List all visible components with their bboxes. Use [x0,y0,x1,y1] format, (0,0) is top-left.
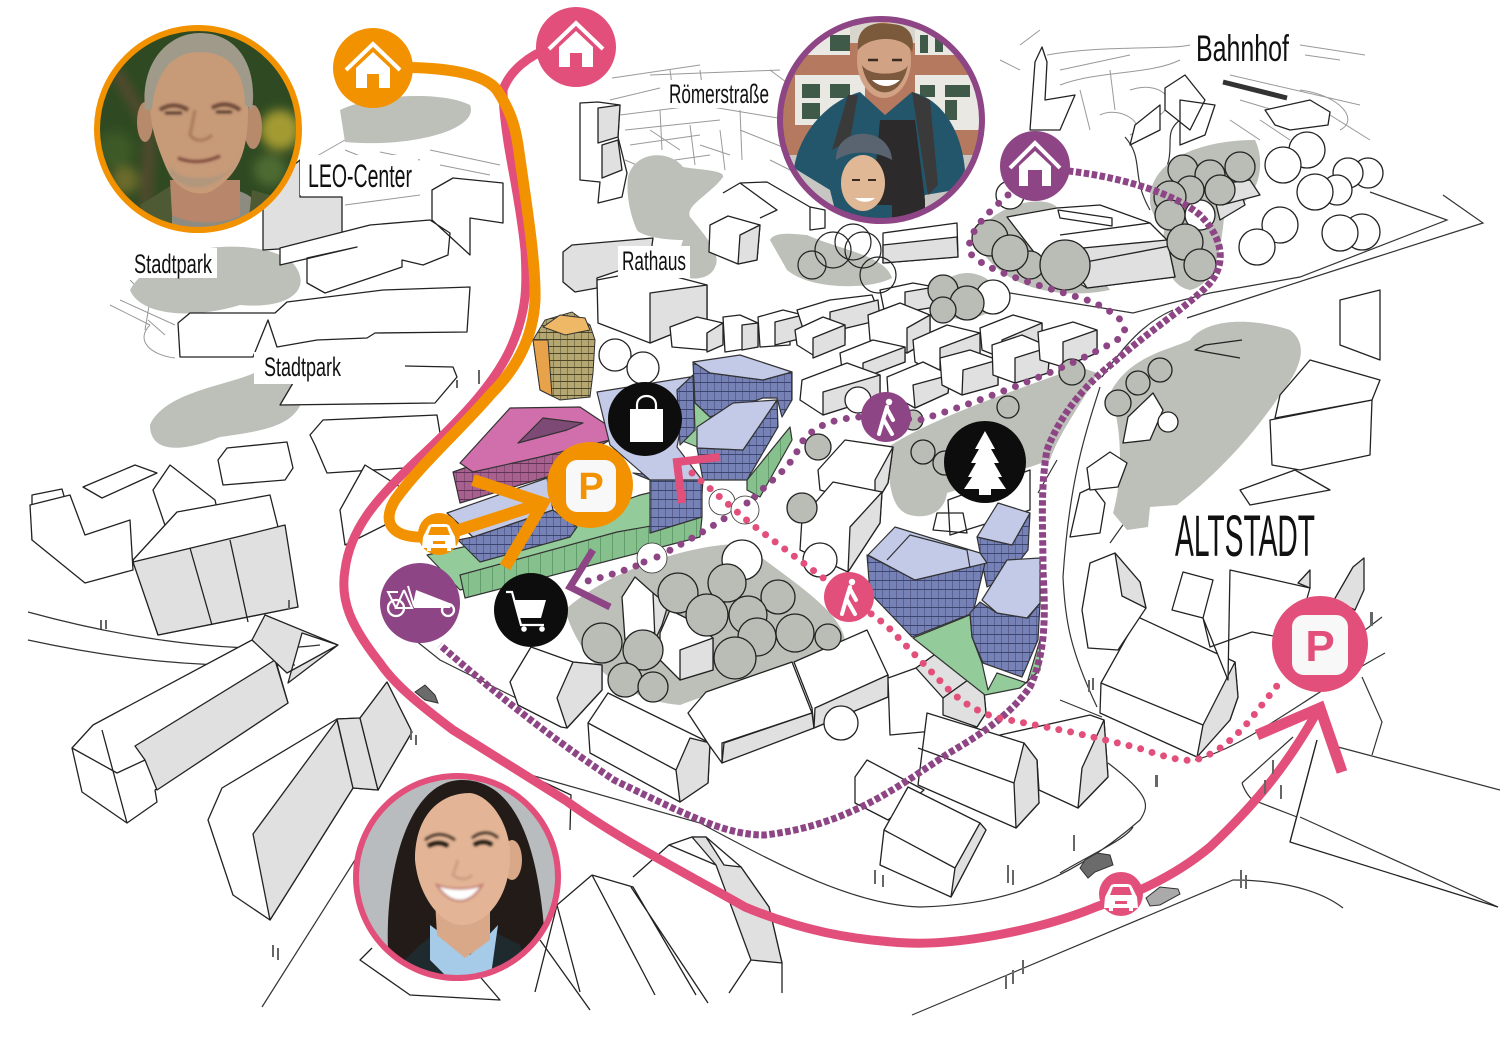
lower block roof [447,478,553,537]
label: LEO-Center: LEO-Center [308,158,412,194]
tower side [677,375,695,445]
left block roof [868,527,987,580]
green spaces [130,96,1301,705]
building: south of Stadtpark [310,415,440,473]
buildings: south corner [518,770,782,1003]
label: ALTSTADT: ALTSTADT [1175,504,1315,569]
label: Stadtpark upper: Stadtpark [134,249,212,279]
back tower facade [977,513,1030,587]
pink route: car route to Altstadt parking [344,48,1317,943]
green space: residential grove [935,273,1005,319]
small figures [100,370,1373,989]
buildings: Bahnhof cluster [1030,47,1075,130]
buildings: Altstadt [1100,617,1238,757]
building: Bahnhof terrace [1007,205,1175,288]
buildings: tower block north [580,102,627,203]
building: annex [252,615,338,683]
portrait: father and son with bike helmet [775,15,995,230]
green space: east [1110,322,1301,530]
building: long west [72,640,288,823]
green podium [427,480,703,590]
tower building [533,312,595,400]
label: LEO-Center [300,155,418,195]
buildings: market grove houses [622,577,662,645]
white route nodes [637,489,759,573]
label: Stadtpark lower: Stadtpark [264,352,341,382]
buildings: west group [32,442,405,545]
building: left edge [30,495,133,583]
development site: west complex [427,355,792,598]
building: long south [208,682,412,920]
label: Stadtpark upper [128,248,217,279]
icon: shopping cart [494,573,568,647]
green space: central park [888,367,1097,516]
pink arrowhead to parking [1257,708,1342,772]
trees: white [599,132,1383,740]
orange route: car route to parking [373,67,535,537]
purple arrow at shop [570,550,610,607]
purple node dots [640,500,750,566]
central block facade [633,473,702,533]
map: distant sketched city lines [110,30,1370,358]
icon: purple home [1000,131,1070,201]
buildings: north houses [709,216,760,264]
portrait: young woman [350,770,565,985]
label: Bahnhof [1190,28,1294,69]
trees: grey [582,152,1255,702]
icon: pink parking [1272,596,1368,692]
label: Stadtpark lower [254,352,347,384]
purple dotted route: walking path [580,195,1125,583]
building: large west block [133,495,298,635]
icon: grey cars [415,685,1180,906]
green base [913,615,1040,695]
building: southeast [1290,740,1498,907]
green space: market grove [565,544,845,705]
building: long bar [280,366,457,405]
icon: cargo bike [380,563,460,643]
buildings: Stadtpark row [178,287,470,357]
icon: pink pedestrian [824,572,874,622]
icon: fir tree [944,421,1026,503]
pink dotted route: walking path [692,473,1280,760]
green facade [460,517,702,598]
label: Römerstraße [664,79,772,109]
orange arrow to parking [437,480,543,567]
buildings: LEO-Center towers [263,160,342,250]
green space: behind purple home [975,201,1110,293]
buildings: center houses [818,440,893,505]
green space: near Rathaus [627,155,723,279]
magenta building roof [460,407,610,472]
trees: outline only [798,224,896,293]
front block roof [982,558,1040,618]
windows [795,25,985,130]
label: Rathaus: Rathaus [622,246,686,276]
icon: shopping bag [608,382,682,456]
labels [128,28,1320,569]
development site: east complex [867,503,1040,695]
building: Rathaus [563,238,653,292]
green space: Stadtpark south [150,370,305,448]
green space: Stadtpark west [130,247,301,313]
buildings: LEO-Center rows [280,178,503,293]
buildings: south row [510,647,602,728]
icon: pink car [1099,872,1143,916]
label: Bahnhof: Bahnhof [1196,28,1289,69]
pink arrow at centre [677,457,720,503]
buildings: Römerstraße residential [670,317,723,350]
label: Römerstraße: Römerstraße [669,79,769,109]
skylight [518,418,583,443]
icon: pink home [536,7,616,87]
middle tower facade [697,400,778,480]
magenta building facade [453,430,610,503]
front block facade [970,602,1040,677]
label: ALTSTADT [1168,504,1320,569]
purple route: cycle path [440,170,1220,835]
icon: orange home [333,28,413,108]
icon: orange car [418,513,460,555]
left block facade [867,555,985,637]
north tower roof [693,355,792,380]
icon: purple pedestrian [861,392,911,442]
icon: orange parking [547,442,633,528]
green space: north [770,234,892,286]
north tower facade [693,362,792,417]
icon: orange parking: P [578,466,604,508]
lower block facade [458,510,577,562]
middle tower roof [697,400,777,450]
green space: Stadtpark north [340,96,471,143]
green between towers [680,400,720,448]
back tower roof [977,503,1030,545]
portrait: older man [94,25,302,233]
icon: pink parking: P [1305,622,1335,671]
green space: near Bahnhof [1150,140,1260,290]
building: Rathaus main [597,270,707,343]
central block roof [597,377,702,480]
label: Rathaus [618,246,690,278]
green strip east [747,427,792,497]
